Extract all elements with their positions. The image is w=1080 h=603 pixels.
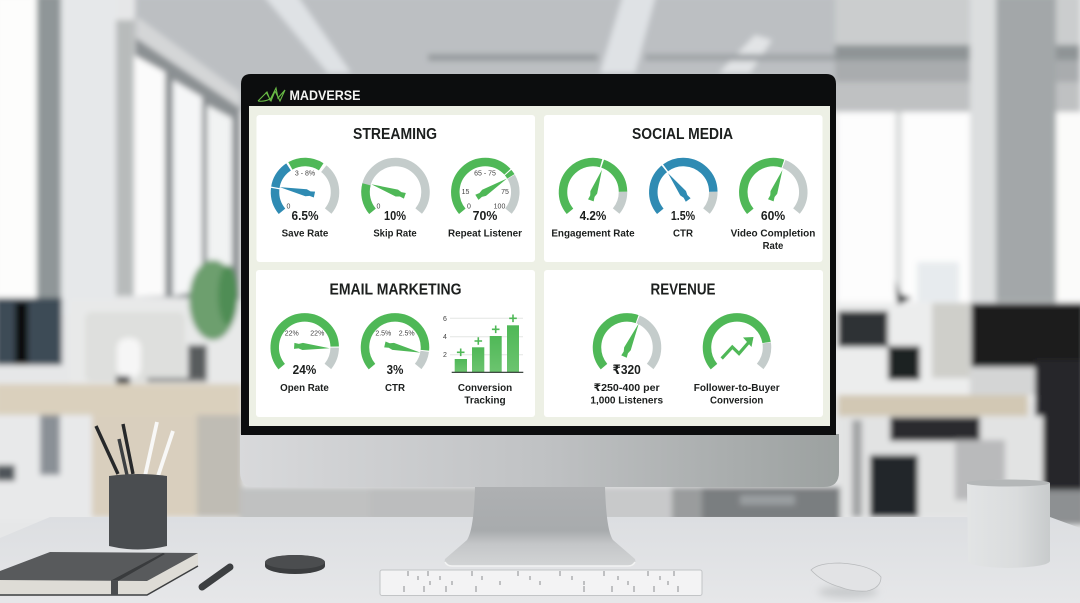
screen background [249,106,830,426]
bar chart: conversion tracking [443,314,523,406]
gauge: ctr [653,162,713,240]
bar chart: conversion tracking: 6 [443,316,447,323]
gauge: save rate: Save Rate [282,228,328,240]
logo mark [258,88,285,101]
behind monitor [700,487,840,522]
pen holder with pencils [96,422,173,550]
panel: email marketing [256,270,535,417]
monitor bezel [241,74,836,435]
bar chart: conversion tracking: Tracking [464,394,506,406]
gauge: revenue per listeners: 1,000 Listeners [590,394,663,406]
left wall and windows [0,0,36,298]
right lower office [835,302,1080,402]
heading: SOCIAL MEDIA [632,126,733,143]
right windows and pillar [837,112,895,302]
gauge: save rate: 6.5% [292,208,319,223]
round puck [265,555,325,574]
bar chart: conversion tracking: 4 [443,334,447,341]
gauge: repeat listener [448,162,522,240]
brand logo [258,88,360,103]
gauge: email ctr: 2.5% [399,330,415,338]
gauge: email ctr [365,317,425,394]
panel: revenue [544,270,823,417]
gauge: repeat listener: 70% [473,208,498,223]
gauge: follower-to-buyer conversion [694,317,780,406]
coffee mug [966,480,1050,568]
gauge: video completion rate: 60% [761,208,786,223]
gauge: email ctr: 3% [387,362,404,377]
heading: EMAIL MARKETING [330,282,462,298]
gauge: revenue per listeners: ₹250-400 per [594,382,660,394]
bar chart: conversion tracking: Conversion [458,382,512,394]
gauge: video completion rate [731,162,815,252]
gauge: repeat listener: 0 [467,204,471,210]
brand name: MADVERSE [290,88,360,103]
gauge: revenue per listeners: ₹320 [613,362,641,377]
heading: STREAMING [353,126,437,143]
gauge: follower-to-buyer conversion: Follower-to-Buyer [694,382,780,394]
monitor [240,74,839,487]
gauge: open rate [275,317,335,394]
gauge: revenue per listeners [590,317,663,406]
pen [202,567,230,587]
heading: REVENUE [650,282,716,298]
ceiling [135,0,970,110]
icon: rising arrow [722,337,754,358]
panel: social media [544,115,822,262]
gauge: video completion rate: Rate [763,240,783,252]
gauge: video completion rate: Video Completion [731,228,815,240]
gauge: ctr: CTR [673,228,693,240]
gauge: open rate: Open Rate [280,382,329,394]
gauge: engagement rate: 4.2% [580,208,607,223]
gauge: engagement rate: Engagement Rate [551,228,635,240]
plant [189,260,237,340]
gauge: ctr: 1.5% [671,208,696,223]
gauge: skip rate [366,162,426,240]
gauge: save rate: 3 - 8% [295,170,315,178]
gauge: follower-to-buyer conversion: Conversion [710,394,763,406]
gauge: email ctr: 2.5% [375,330,391,338]
gauge: open rate: 22% [285,330,299,338]
mouse [811,563,881,598]
keyboard [380,570,702,596]
gauge: repeat listener: Repeat Listener [448,228,522,240]
gauge: skip rate: Skip Rate [373,228,417,240]
monitor stand [445,487,635,566]
gauge: repeat listener: 100 [494,204,505,210]
gauge: skip rate: 10% [384,208,406,223]
gauge: skip rate: 0 [377,204,381,210]
desk surface [0,517,1080,603]
monitor chin [240,434,839,487]
notebook [0,552,198,596]
gauge: repeat listener: 15 [462,189,469,196]
gauge: engagement rate [551,162,635,240]
gauge: open rate: 22% [310,330,324,338]
gauge: save rate [270,162,335,240]
gauge: email ctr: CTR [385,382,405,394]
gauge: save rate: 0 [287,204,291,210]
gauge: repeat listener: 75 [501,189,509,196]
panel: streaming [256,115,535,262]
gauge: repeat listener: 65 - 75 [474,170,496,178]
bar chart: conversion tracking: 2 [443,352,447,359]
gauge: open rate: 24% [293,362,317,377]
